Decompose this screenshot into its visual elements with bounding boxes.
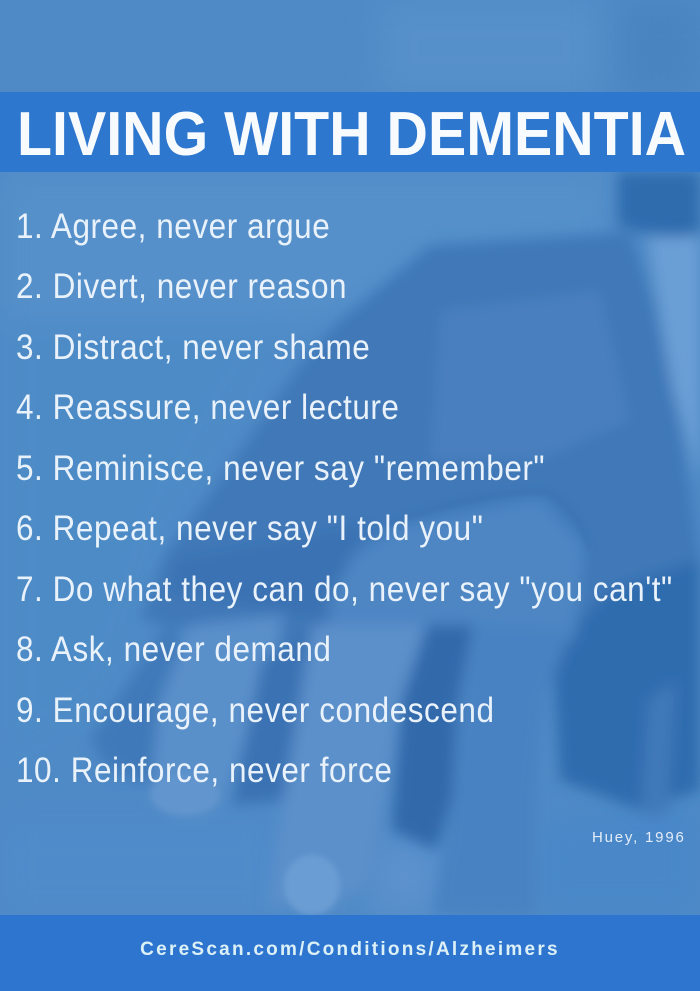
back of hand — [140, 232, 700, 660]
tip 1: 1. Agree, never argue — [16, 207, 330, 246]
tip 9: 9. Encourage, never condescend — [16, 691, 495, 730]
tip 5: 5. Reminisce, never say "remember" — [16, 449, 545, 488]
tip 2: 2. Divert, never reason — [16, 267, 347, 306]
finger two — [268, 625, 424, 910]
tip 10: 10. Reinforce, never force — [16, 751, 392, 790]
citation: Huey, 1996 — [592, 829, 686, 846]
tip 4: 4. Reassure, never lecture — [16, 388, 399, 427]
contour line — [385, 492, 590, 550]
lower knuckle band — [330, 497, 585, 640]
tip 6: 6. Repeat, never say "I told you" — [16, 509, 483, 548]
footer banner with URL — [0, 915, 700, 991]
title: LIVING WITH DEMENTIA — [17, 100, 686, 169]
finger three — [433, 625, 572, 915]
tip 3: 3. Distract, never shame — [16, 328, 370, 367]
far finger shadow — [90, 620, 200, 790]
tip 7: 7. Do what they can do, never say "you can't" — [16, 570, 673, 609]
gap between fingers — [392, 625, 473, 850]
footer URL: CereScan.com/Conditions/Alzheimers — [140, 939, 560, 960]
title banner — [0, 92, 700, 172]
finger one — [150, 615, 285, 816]
tip 8: 8. Ask, never demand — [16, 630, 331, 669]
nail — [284, 855, 340, 915]
list of ten tips — [16, 207, 673, 790]
dark right side — [553, 560, 700, 810]
